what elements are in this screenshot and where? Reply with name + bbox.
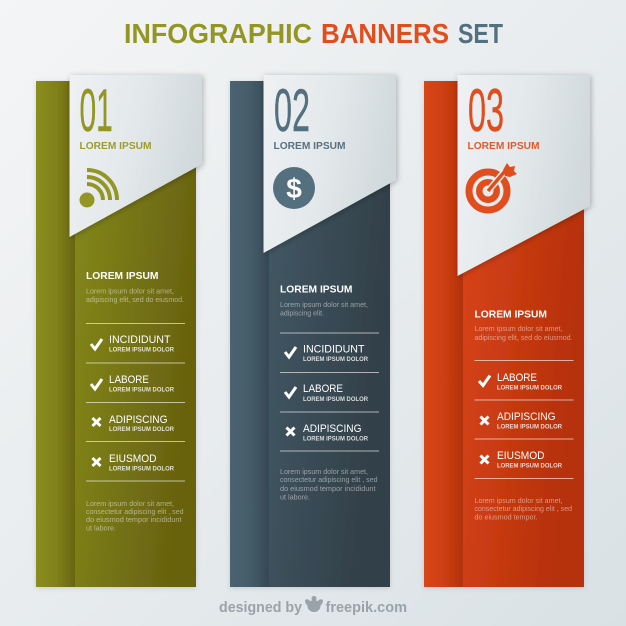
item: labore: LOREM IPSUM DOLOR [497,384,562,392]
footer text 01: Lorem ipsum dolor sit amet, [86,499,174,508]
item: labore [479,372,562,392]
card 02 [264,75,396,253]
banner 02 body [230,81,390,587]
card 01 [70,75,202,237]
item: adipiscing [480,411,562,430]
item: eiusmod: EIUSMOD [109,453,157,465]
intro text 01: LOREM IPSUM [86,271,158,282]
footer text 02 [280,467,378,502]
item: labore: LABORE [497,372,537,384]
item: incididunt: INCIDIDUNT [109,334,171,346]
intro text 01: adipiscing elit, sed do eiusmod. [86,295,184,304]
checklist 01 [86,324,185,481]
item: eiusmod: EIUSMOD [497,450,545,462]
footer text 02: Lorem ipsum dolor sit amet, [280,467,368,476]
title: INFOGRAPHIC [124,18,312,49]
icon: dollar coin: $ [286,173,302,204]
footer text 03: Lorem ipsum dolor sit amet, [474,496,562,505]
intro text 03 [474,310,572,342]
panel: banner 01 [36,75,202,587]
footer text 01: ut labore. [86,524,116,532]
footer credit: freepik.com [326,599,407,616]
item: adipiscing: ADIPISCING [497,411,556,423]
card heading 02: LOREM IPSUM [274,140,346,152]
intro text 03: adipiscing elit, sed do eiusmod. [474,333,572,342]
card heading 01: LOREM IPSUM [80,140,152,152]
intro text 03: Lorem ipsum dolor sit amet, [474,324,562,333]
card heading 03: LOREM IPSUM [468,140,540,152]
number 01: 01 [80,78,113,145]
item: incididunt: LOREM IPSUM DOLOR [109,346,174,354]
item: adipiscing: ADIPISCING [303,423,362,435]
footer text 02: consectetur adipiscing elit , sed [280,475,378,484]
item: adipiscing: LOREM IPSUM DOLOR [109,426,174,433]
item: adipiscing: ADIPISCING [109,414,168,426]
item: labore: LABORE [109,374,149,386]
footer text 02: do eiusmod tempor incididunt [280,484,376,493]
footer text 03: consectetur adipiscing elit , sed [474,504,572,513]
item: labore: LABORE [303,383,343,395]
title: SET [458,18,503,49]
item: adipiscing: LOREM IPSUM DOLOR [303,436,368,442]
footer text 01 [86,499,184,532]
intro text 01: Lorem ipsum dolor sit amet, [86,286,174,296]
title [124,18,503,49]
footer text 01: do eiusmod tempor incididunt [86,515,182,524]
footer credit: designed by [219,599,303,616]
footer text 03: do eiusmod tempor. [474,512,538,522]
item: labore [285,383,368,403]
title: BANNERS [321,18,449,49]
icon: target with dart [469,163,517,210]
icon: dollar coin [273,167,315,209]
footer text 02: ut labore. [280,492,310,502]
intro text 03: LOREM IPSUM [474,310,547,320]
checklist 03 [474,360,574,478]
item: eiusmod [92,453,174,472]
item: incididunt [91,334,174,354]
card 03 [458,75,590,276]
panel: banner 02 [230,75,396,587]
panel: banner 03 [424,75,590,587]
icon: freepik logo [305,596,323,612]
item: eiusmod: LOREM IPSUM DOLOR [497,462,562,470]
intro text 02 [280,284,368,318]
intro text 02: adipiscing elit. [280,308,324,318]
item: adipiscing: LOREM IPSUM DOLOR [497,424,562,430]
item: labore: LOREM IPSUM DOLOR [303,396,368,403]
footer text 01: consectetur adipiscing elit , sed [86,507,184,516]
footer text 03 [474,496,572,522]
item: adipiscing [286,423,368,442]
icon: rss signal [80,170,117,208]
item: labore [91,374,174,394]
item: labore: LOREM IPSUM DOLOR [109,386,174,394]
number 03: 03 [468,77,504,145]
banner 01 body [36,81,196,587]
number 02: 02 [274,77,310,145]
checklist 02 [280,333,379,451]
item: adipiscing [92,414,174,433]
item: eiusmod: LOREM IPSUM DOLOR [109,466,174,472]
intro text 01 [86,271,184,304]
item: incididunt: LOREM IPSUM DOLOR [303,356,368,363]
intro text 02: LOREM IPSUM [280,284,352,296]
footer credit [219,596,407,616]
item: incididunt: INCIDIDUNT [303,344,365,356]
item: incididunt [285,344,368,363]
item: eiusmod [480,450,562,470]
intro text 02: Lorem ipsum dolor sit amet, [280,300,368,309]
banner 03 body [424,81,584,587]
